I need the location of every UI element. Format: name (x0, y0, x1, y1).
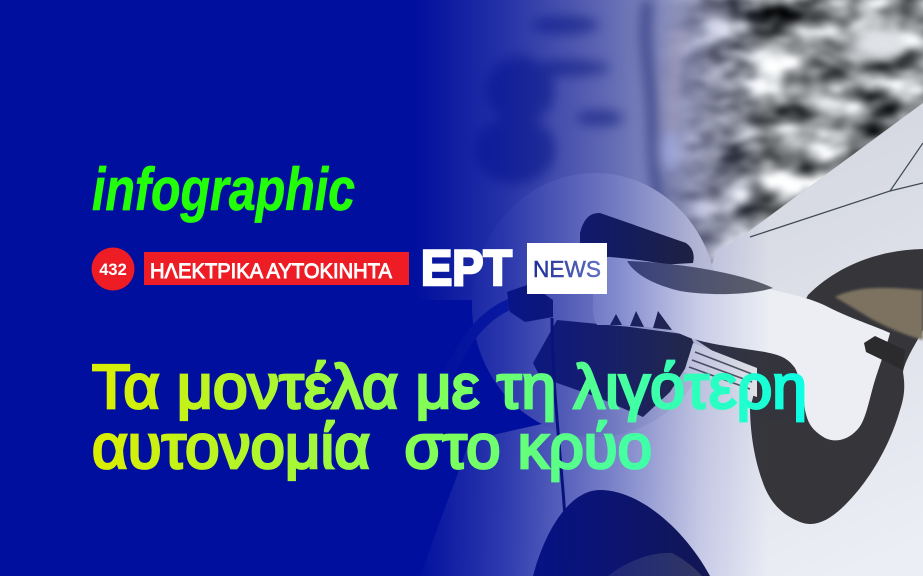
photo: plug teeth (610, 311, 672, 330)
photo: plug handle (593, 257, 890, 440)
badge: issue number (92, 248, 134, 290)
photo: plug dark grip (627, 261, 773, 294)
photo: warning sticker (684, 343, 757, 397)
photo: charging port (750, 249, 923, 524)
logo: ERT: ΕΡΤ (421, 240, 512, 296)
photo: cable holster upper (580, 213, 694, 266)
heading: infographic: infographic (92, 156, 355, 223)
photo: snowy forest background (400, 0, 923, 310)
photo: cable holster lower (533, 320, 697, 417)
photo: charging cable (440, 303, 513, 400)
photo: wheel arch (533, 490, 710, 576)
photo: cable sleeve (507, 284, 553, 322)
photo: car body (420, 103, 923, 576)
photo: thin wire (552, 318, 568, 576)
logo: NEWS: NEWS (533, 256, 601, 282)
photo: charging flap (472, 173, 718, 437)
title: Τα μοντέλα με τη λιγότερη (92, 353, 807, 422)
label: category: ΗΛΕΚΤΡΙΚΑ ΑΥΤΟΚΙΝΗΤΑ (150, 259, 393, 283)
photo: tyre (608, 553, 702, 576)
photo: body panel lines (750, 143, 923, 237)
logo: NEWS (527, 243, 607, 294)
title: αυτονομία στο κρύο (92, 413, 652, 482)
photo: plug tip (864, 336, 905, 370)
title (92, 353, 807, 482)
badge: issue number: 432 (99, 261, 127, 279)
photo: port interior (835, 288, 923, 340)
photo: shadow under plug (693, 338, 808, 425)
